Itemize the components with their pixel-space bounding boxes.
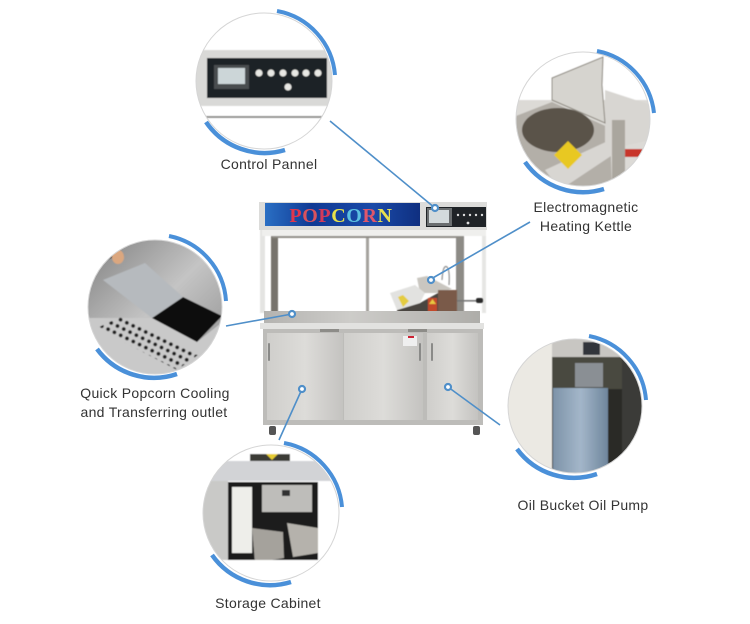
panel: oil bucket photo [505,335,650,480]
panel: cooling outlet photo [85,236,226,378]
panel: kettle photo [510,50,660,192]
kettle [390,267,483,312]
heading: quick popcorn cooling: and Transferring outlet [81,404,227,420]
heading: oil bucket oil pump: Oil Bucket Oil Pump [518,497,648,513]
header with banner [259,202,487,230]
machine control panel [426,207,486,227]
cabinet [263,329,483,425]
panel: storage cabinet photo [200,443,345,590]
machine frame [260,229,486,313]
heading: electromagnetic heating kettle: Heating Kettle [540,218,632,234]
banner title: POPCORN [289,205,393,227]
heading: quick popcorn cooling: Quick Popcorn Cooling [80,385,230,401]
heading: electromagnetic heating kettle: Electromagnetic [534,199,638,215]
counter [260,311,484,329]
callout dots [289,205,451,392]
wheels [269,426,480,435]
popcorn machine [259,202,487,435]
panel: control panel photo [190,10,340,155]
heading: control pannel: Control Pannel [221,156,317,172]
heading: storage cabinet: Storage Cabinet [215,595,321,611]
callout lines [226,121,530,440]
